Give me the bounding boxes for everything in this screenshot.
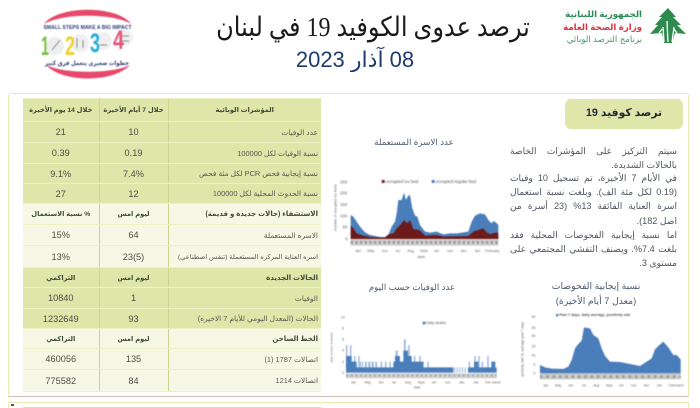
text block: summary (510, 146, 677, 268)
row: new deaths (23, 288, 321, 308)
row: hotline header: التراكمي (46, 336, 75, 342)
row: new cases: 1232649 (43, 314, 79, 324)
logo: small steps make a big impact: 4 (113, 25, 124, 55)
row: hospitalisation header: ليوم امس (117, 211, 150, 218)
logo: small steps make a big impact (41, 9, 133, 80)
row: new deaths: 1 (131, 293, 136, 303)
row: deaths (23, 122, 321, 142)
next table top edge (23, 407, 321, 408)
chart: positivity rate: 5 (533, 363, 535, 367)
text block: summary: اما نسبة إيجابية الفحوصات المحلية فقد (510, 230, 677, 240)
chart: positivity rate: Jul (582, 384, 586, 388)
row: calls 1787: 460056 (45, 354, 76, 364)
row: deaths: 21 (56, 127, 66, 137)
ministry logo text: وزارة الصحة العامة (563, 22, 642, 32)
chart title: beds used: عدد الاسرة المستعملة (374, 137, 454, 147)
chart: positivity rate: Jan (657, 384, 662, 388)
chart: occupied beds: nov (447, 249, 453, 253)
next panel top edge (8, 402, 689, 408)
row: hospitalisation header (23, 204, 321, 224)
chart: occupied beds: 250 (340, 180, 348, 185)
chart: occupied beds: number of occupied icu beds (334, 184, 338, 231)
chart title: test positivity: نسبة إيجابية الفحوصات (552, 281, 640, 291)
chart: occupied beds: Apr (355, 249, 362, 253)
chart: occupied beds: Jan (474, 249, 480, 253)
row: calls 1787: 135 (126, 354, 141, 364)
row: beds used: 64 (128, 230, 139, 240)
row: local incidence: 27 (56, 188, 66, 198)
indicators table (23, 98, 321, 392)
row: calls 1214: اتصالات 1214 (276, 376, 318, 385)
row: calls 1214 (23, 370, 321, 391)
chart: daily deaths: Jun (378, 381, 384, 385)
row: new cases header (23, 268, 321, 287)
row: hospitalisation header: الاستشفاء (حالات جديدة و قديمة) (205, 211, 318, 218)
text block: summary: سيتم التركيز على المؤشرات الخاصة (510, 146, 677, 156)
chart: occupied beds: oct (434, 249, 439, 253)
ministry logo text: برنامج الترصد الوبائي (567, 34, 642, 44)
chart: occupied beds: date (417, 254, 426, 259)
chart: positivity rate: 10 (531, 353, 535, 357)
row: hospitalisation header: % نسبة الاستعمال (31, 211, 90, 218)
row: hotline header: ليوم امس (117, 336, 150, 342)
text block: summary: بلغت 7.4%. ويصنف التفشي المجتمعي على (510, 244, 677, 254)
chart: daily deaths: Feb march (485, 381, 501, 385)
chart: positivity rate: Past 7 days, daily average, positivity rate (559, 313, 630, 317)
chart: daily deaths: 6 (342, 338, 344, 342)
chart: daily deaths: 8 (342, 327, 344, 331)
table header row: خلال 7 أيام الأخيرة (103, 107, 164, 114)
chart: positivity rate: 25 (531, 326, 535, 330)
icon: cedar tree (650, 8, 686, 43)
chart: positivity rate: 15 (531, 345, 535, 349)
chart: daily deaths: date (414, 385, 421, 389)
row: calls 1214: 84 (128, 376, 139, 386)
chart: occupied beds: 50 (343, 225, 348, 230)
chart: occupied beds (334, 179, 500, 259)
heading pill: covid surveillance (565, 99, 683, 129)
row: PCR positivity: نسبة إيجابية فحص PCR لكل مئة فحص (199, 169, 318, 178)
chart: daily deaths: oct (432, 381, 436, 385)
row: deaths: عدد الوفيات (281, 128, 318, 136)
chart: positivity rate: Februarch (669, 384, 684, 388)
table header row (23, 99, 321, 391)
table header row: المؤشرات الوبائية (216, 107, 274, 114)
chart: occupied beds: occupied icu bed (386, 179, 419, 184)
chart: daily deaths: Jul (392, 381, 396, 385)
main panel (8, 93, 689, 397)
text block: summary: مستوى 3. (639, 258, 677, 268)
row: new cases (23, 309, 321, 328)
ministry logo text: الجمهورية اللبنانية (565, 9, 642, 19)
logo: small steps make a big impact: 2 (65, 31, 75, 61)
row: local incidence (23, 184, 321, 203)
chart: positivity rate: Sept (606, 384, 613, 388)
row: death rate: 0.19 (125, 148, 142, 158)
logo: small steps make a big impact: 3 (90, 28, 100, 58)
chart: occupied beds: Jul (395, 249, 400, 253)
row: new cases header: التراكمي (46, 274, 75, 282)
chart: daily deaths: Jan (473, 381, 479, 385)
row: beds used: 15% (52, 230, 70, 240)
chart: positivity rate (520, 312, 684, 388)
row: calls 1214: 775582 (45, 376, 76, 386)
chart: daily deaths: 4 (342, 349, 344, 353)
ministry logo text (563, 9, 642, 44)
chart: daily deaths: Sept (418, 381, 425, 385)
heading pill: covid surveillance: ترصد كوفيد 19 (586, 107, 662, 119)
chart: positivity rate: 20 (531, 334, 535, 338)
logo: small steps make a big impact: 1 (41, 31, 49, 61)
row: beds used: الاسره المستعملة (264, 230, 318, 240)
chart: daily deaths: 10 (341, 316, 345, 320)
text block: summary: بالحالات الشديدة. (611, 160, 677, 170)
row: local incidence: نسبة الحدوث المحلية لكل 100000 (213, 189, 318, 198)
chart: positivity rate: 0 (533, 372, 535, 376)
row: death rate: نسبة الوفيات لكل 100000 (237, 148, 318, 158)
row: PCR positivity: 7.4% (123, 168, 144, 178)
small marker (11, 404, 14, 406)
chart: positivity rate: oct (619, 384, 624, 388)
row: ICU beds (23, 246, 321, 267)
row: death rate: 0.39 (52, 148, 70, 158)
chart: daily deaths: Daily deaths (426, 321, 446, 325)
chart: positivity rate: Aug (593, 384, 599, 388)
row: calls 1787 (23, 349, 321, 369)
row: death rate (23, 143, 321, 163)
text block: summary: اسرة العناية الفائقة 13% (23 أسرة من (510, 201, 677, 211)
chart: daily deaths: May (364, 381, 371, 385)
title: ترصد عدوى الكوفيد 19 في لبنان (216, 12, 530, 42)
logo: small steps make a big impact: SMALL STEPS MAKE A BIG IMPACT (44, 25, 132, 31)
row: calls 1787: اتصالات 1787 (1) (264, 354, 318, 364)
chart title: daily deaths: عدد الوفيات حسب اليوم (369, 282, 455, 292)
chart: daily deaths: dec (459, 381, 465, 385)
chart: daily deaths: 2 (342, 360, 344, 364)
logo: small steps make a big impact: خطوات صغيري بتعمل فرق كبير (44, 60, 129, 67)
row: deaths: 10 (128, 127, 139, 137)
row: beds used (23, 225, 321, 245)
chart title: test positivity (552, 281, 640, 306)
chart: occupied beds: May (367, 249, 374, 253)
text block: summary: (0.19 لكل مئة الف). وبلغت نسبة استعمال (510, 187, 677, 197)
row: local incidence: 12 (128, 188, 139, 198)
chart: occupied beds: Aug (407, 249, 414, 253)
chart: daily deaths: Aug (405, 381, 411, 385)
row: PCR positivity: 9.1% (50, 168, 71, 178)
row: ICU beds: 13% (52, 252, 70, 262)
chart: occupied beds: 200 (340, 191, 348, 196)
row: new cases: الحالات (المعدل اليومي للأيام 7 الاخيره) (198, 314, 318, 323)
text block: summary: اصل 182). (637, 216, 677, 226)
chart: occupied beds: 0 (345, 236, 348, 241)
row: new deaths: 10840 (48, 293, 74, 303)
chart: positivity rate: Apr (543, 384, 549, 388)
row: new cases: 93 (128, 314, 139, 324)
row: new cases header: الحالات الجديدة (266, 274, 318, 282)
chart: positivity rate: Jun (568, 384, 574, 388)
chart: daily deaths (330, 316, 502, 389)
chart: occupied beds: Sept (420, 249, 428, 253)
chart title: test positivity: (معدل 7 أيام الأخيرة) (556, 296, 636, 306)
chart: positivity rate: dec (644, 384, 649, 388)
row: hotline header (23, 329, 321, 348)
chart: daily deaths: nov (445, 381, 451, 385)
chart: daily deaths: Apr (351, 381, 357, 385)
row: hotline header: الخط الساخن (272, 336, 318, 342)
row: new cases header: ليوم امس (117, 274, 150, 282)
row: new deaths: الوفيات (295, 294, 318, 302)
chart: occupied beds: 150 (340, 202, 348, 207)
chart: occupied beds: 100 (340, 213, 348, 218)
chart: occupied beds: dec (461, 249, 467, 253)
chart: occupied beds: Jun (382, 249, 388, 253)
row: PCR positivity (23, 164, 321, 183)
chart: positivity rate: positivity rate %, average past 7 days (520, 321, 524, 377)
chart: occupied beds: February (485, 249, 500, 253)
row: ICU beds: اسره العناية المركزه المستعملة (تنفس اصطناعي) (178, 254, 318, 260)
chart: occupied beds: occupied regular bed (436, 179, 477, 184)
chart: positivity rate: nov (631, 384, 637, 388)
chart: positivity rate: May (555, 384, 562, 388)
chart: positivity rate: 30 (531, 315, 535, 319)
text block: summary: في الأيام 7 الأخيرة، تم تسجيل 10 وفيات (510, 173, 677, 183)
date: 08 آذار 2023 (296, 47, 414, 72)
row: ICU beds: 23(5) (123, 252, 144, 262)
table header row: خلال 14 يوم الأخيرة (29, 107, 92, 114)
chart: daily deaths: 0 (342, 371, 344, 375)
